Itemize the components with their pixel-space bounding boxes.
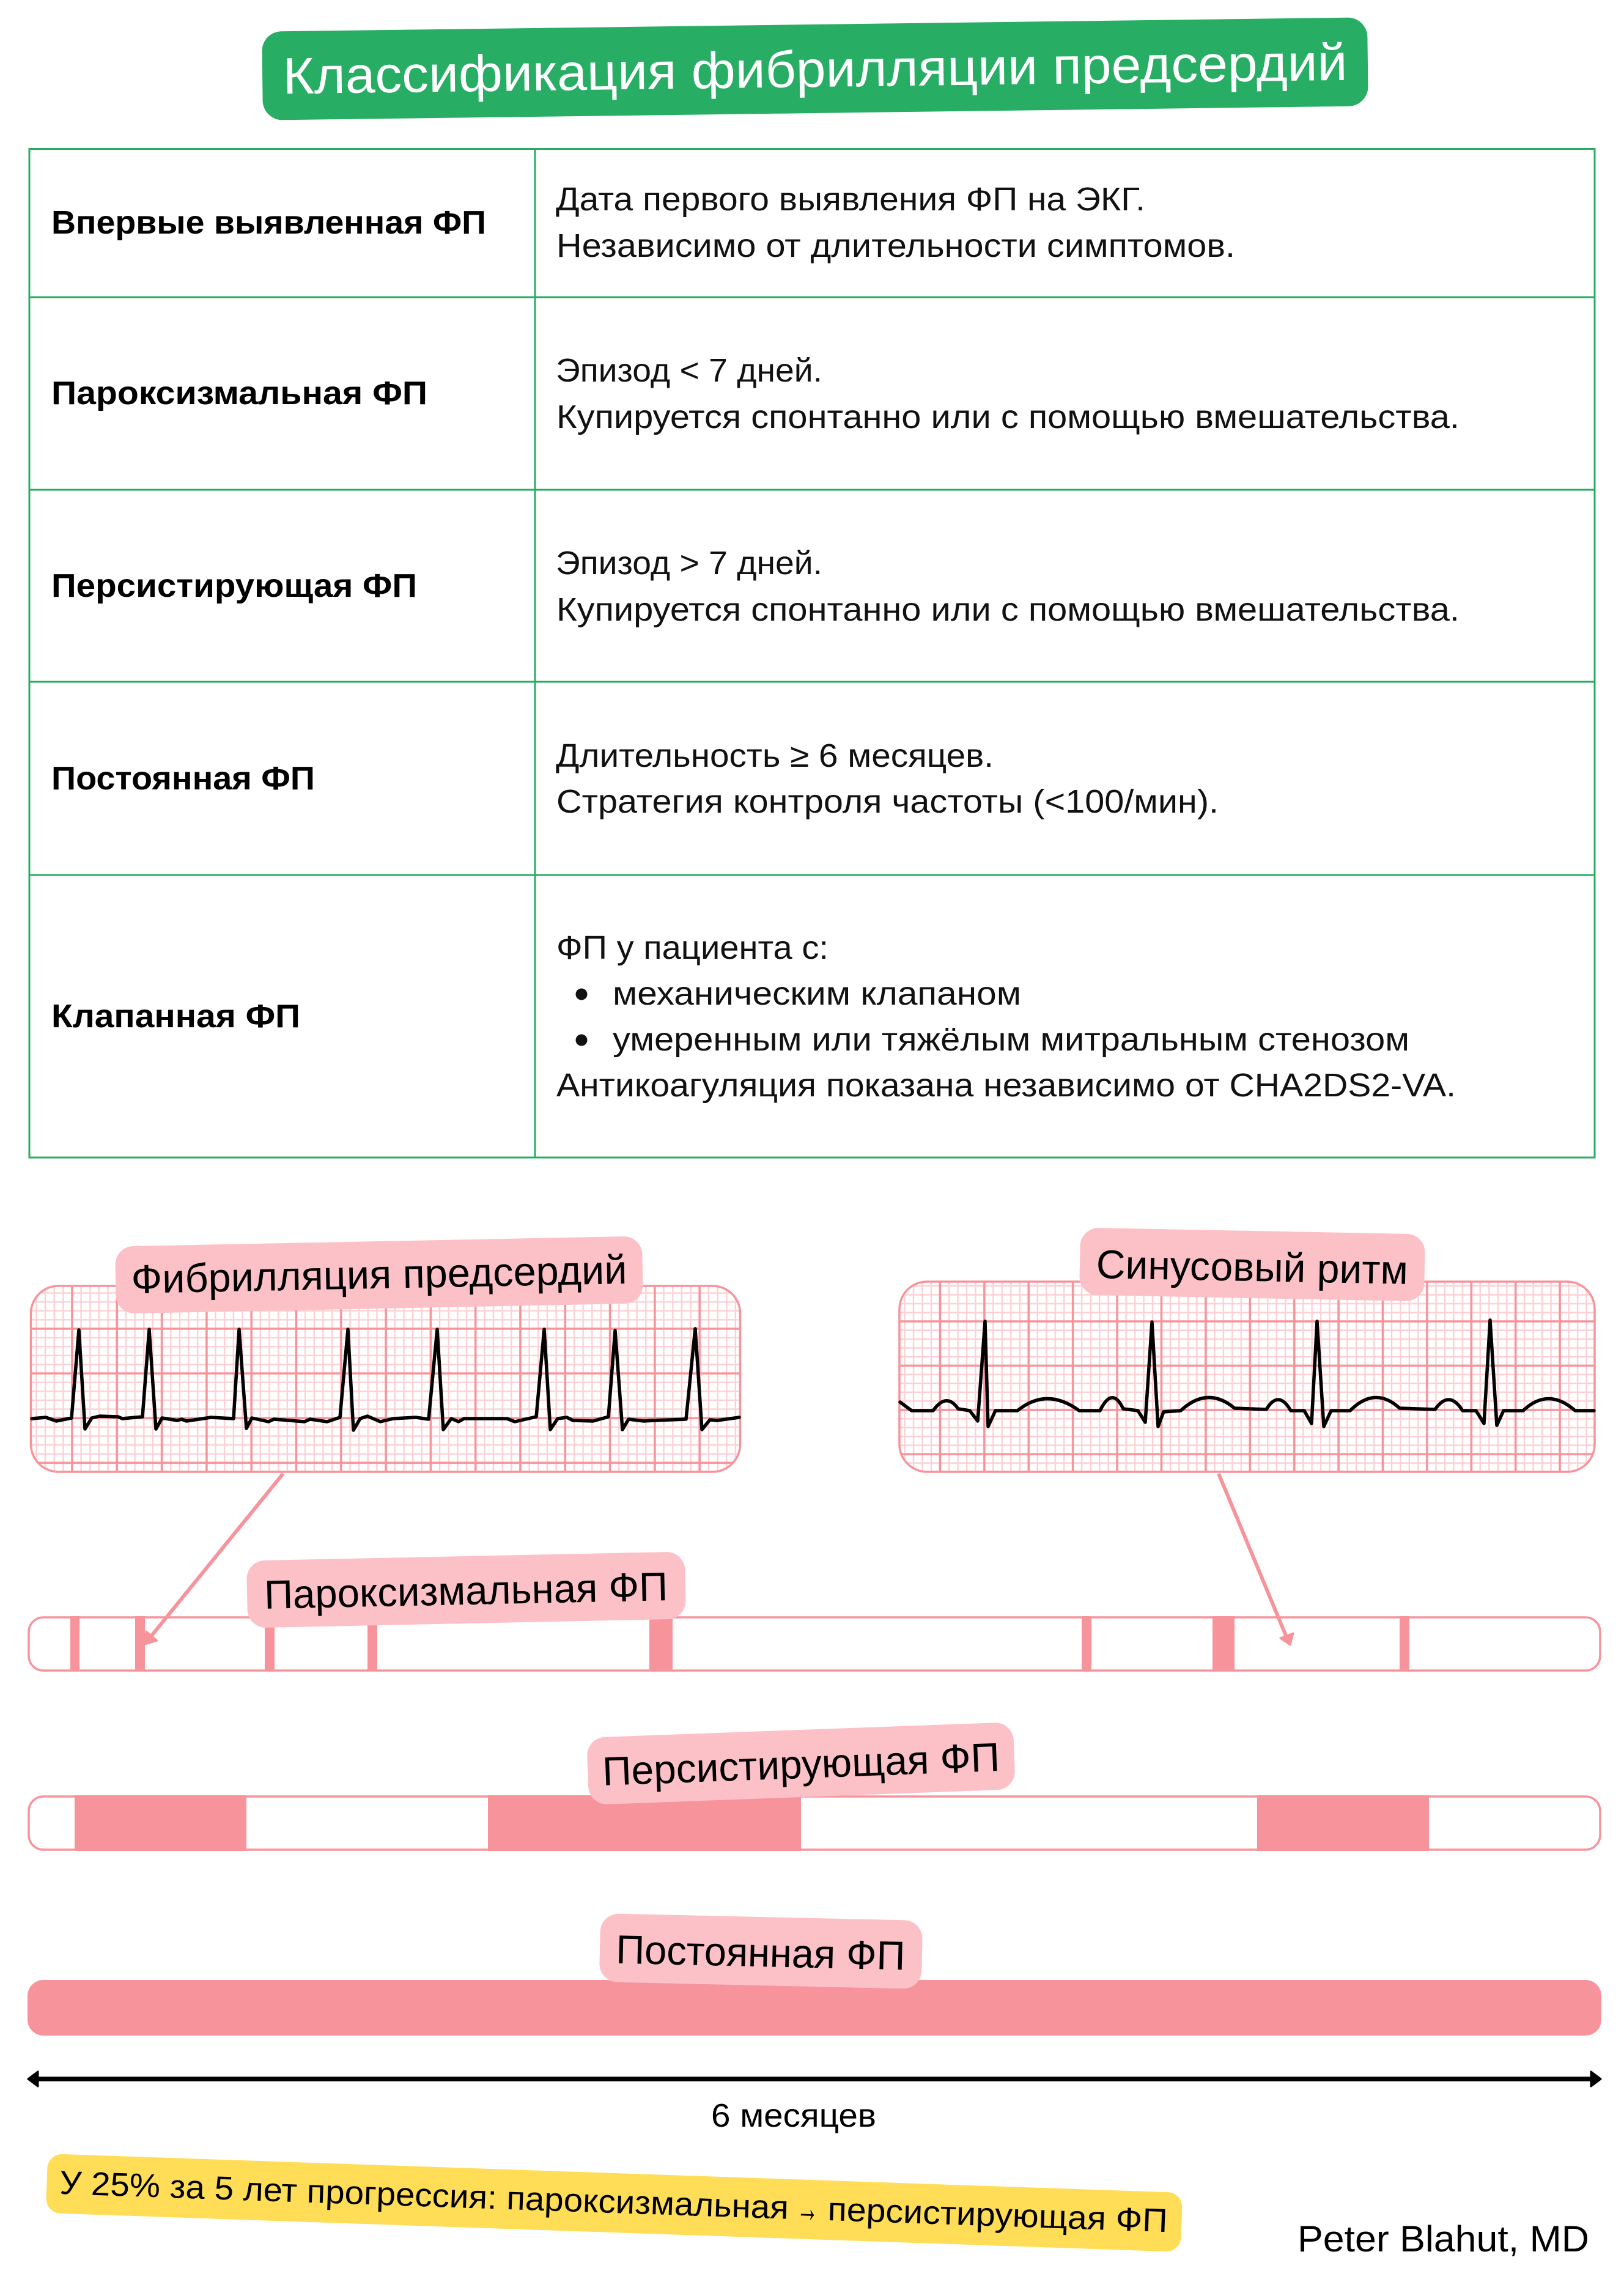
row: permanent AF	[51, 737, 1219, 820]
axis label: 6 months: 6 месяцев	[711, 2097, 876, 2134]
row: paroxysmal AF: Пароксизмальная ФП	[51, 375, 427, 412]
row: valvular AF: ФП у пациента с:	[556, 929, 829, 966]
row: first detected AF: Независимо от длительности симптомов.	[556, 227, 1235, 264]
bar: paroxysmal AF timeline	[29, 1616, 1600, 1671]
row: valvular AF: Клапанная ФП	[51, 998, 300, 1035]
row: permanent AF: Стратегия контроля частоты (<100/мин).	[556, 783, 1219, 820]
row: first detected AF	[51, 181, 1235, 264]
row: first detected AF: Впервые выявленная ФП	[51, 204, 486, 241]
table: classification of atrial fibrillation	[29, 149, 1595, 1158]
row: first detected AF: Дата первого выявления ФП на ЭКГ.	[556, 181, 1145, 218]
panel: AF ECG strip	[31, 1286, 740, 1472]
callout: progression note: У 25% за 5 лет прогрессия: пароксизмальная	[59, 2165, 789, 2226]
ECG trace: sinus rhythm	[900, 1320, 1594, 1427]
label: persistent AF: Персистирующая ФП	[602, 1734, 1000, 1794]
panel: sinus rhythm ECG strip	[899, 1282, 1595, 1472]
ECG trace: atrial fibrillation	[32, 1329, 739, 1430]
label: paroxysmal AF: Пароксизмальная ФП	[264, 1564, 668, 1617]
callout: progression note: персистирующая ФП	[827, 2191, 1168, 2239]
title: Классификация фибрилляции предсердий	[282, 34, 1348, 105]
label: atrial fibrillation: Фибрилляция предсердий	[131, 1247, 627, 1302]
label: persistent AF	[586, 1722, 1016, 1805]
row: persistent AF: Купируется спонтанно или с помощью вмешательства.	[556, 591, 1460, 628]
row: valvular AF	[51, 929, 1456, 1104]
row: permanent AF: Постоянная ФП	[51, 760, 315, 797]
arrow: 6-month time axis	[28, 2072, 1601, 2086]
row: valvular AF: умеренным или тяжёлым митральным стенозом	[613, 1021, 1409, 1058]
row: persistent AF: Эпизод > 7 дней.	[556, 545, 822, 582]
callout: progression note	[46, 2154, 1183, 2252]
row: valvular AF: механическим клапаном	[613, 975, 1021, 1012]
row: permanent AF: Длительность ≥ 6 месяцев.	[556, 737, 994, 774]
row: persistent AF: Персистирующая ФП	[51, 567, 417, 604]
arrow: AF strip to paroxysmal bar	[145, 1474, 283, 1644]
bar: permanent AF timeline	[28, 1980, 1601, 2036]
label: permanent AF	[599, 1913, 923, 1989]
arrow: sinus strip to paroxysmal bar	[1219, 1474, 1293, 1645]
row: paroxysmal AF: Эпизод < 7 дней.	[556, 352, 822, 389]
label: paroxysmal AF	[246, 1551, 686, 1628]
bar: persistent AF timeline	[29, 1795, 1600, 1851]
label: sinus rhythm: Синусовый ритм	[1096, 1241, 1409, 1293]
row: valvular AF: Антикоагуляция показана независимо от CHA2DS2-VA.	[556, 1067, 1456, 1104]
title	[262, 17, 1368, 120]
label: sinus rhythm	[1079, 1228, 1425, 1301]
row: persistent AF	[51, 545, 1460, 628]
label: atrial fibrillation	[115, 1236, 643, 1313]
row: paroxysmal AF	[51, 352, 1460, 435]
label: permanent AF: Постоянная ФП	[616, 1927, 906, 1978]
author credit: Peter Blahut, MD	[1297, 2218, 1589, 2259]
row: paroxysmal AF: Купируется спонтанно или с помощью вмешательства.	[556, 399, 1460, 435]
callout: progression note: →	[796, 2185, 819, 2230]
